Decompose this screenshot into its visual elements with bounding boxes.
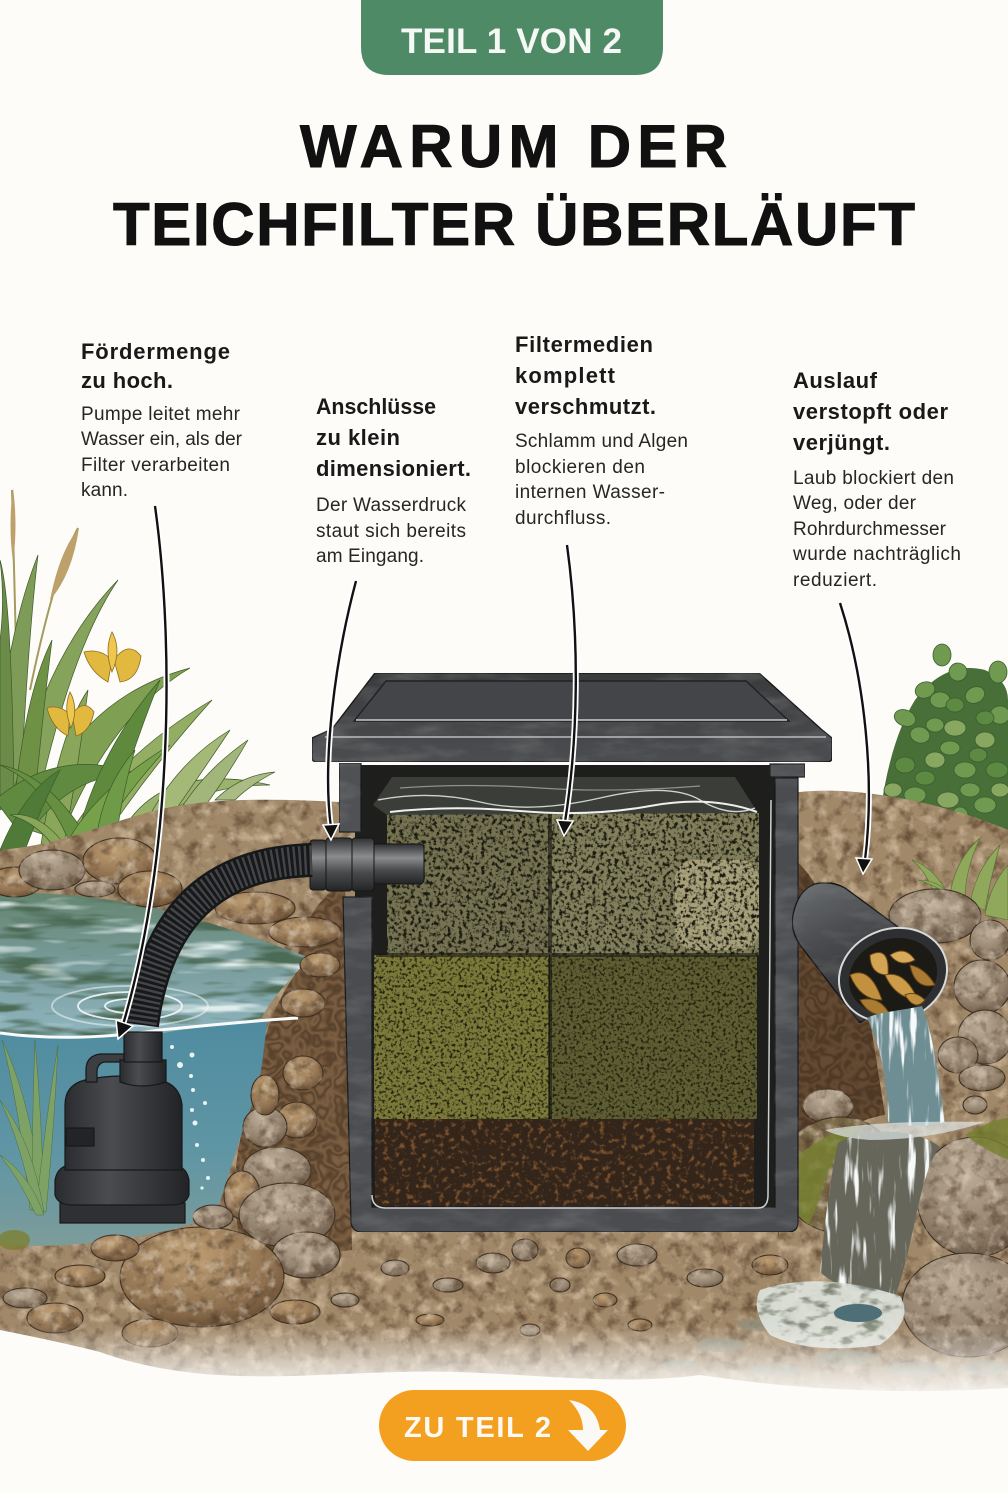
callout: connectors: dimensioniert. — [316, 456, 471, 481]
callout: pump flow: Pumpe leitet mehr — [81, 404, 241, 425]
filter sponge bottom left — [374, 955, 549, 1119]
pump base — [55, 1165, 189, 1205]
outlet pipe with leaves — [792, 883, 960, 1037]
title — [113, 113, 915, 258]
corrugated hose — [142, 860, 312, 1025]
callout: connectors: zu klein — [316, 425, 400, 450]
lower fall — [820, 1132, 940, 1294]
rocks and pebbles — [0, 838, 1008, 1357]
submersible pump — [55, 1032, 189, 1223]
callout: pump flow: Fördermenge — [81, 339, 230, 364]
tank body frame — [339, 763, 805, 1232]
icon: jammed leaves — [850, 951, 935, 1015]
ground bank — [0, 791, 1008, 1391]
icon: green bush — [880, 644, 1008, 835]
seam between sponges — [376, 813, 757, 1119]
pond surface — [0, 893, 310, 1038]
callout: connectors: am Eingang. — [316, 546, 424, 567]
callout: connectors: Der Wasserdruck — [316, 495, 466, 516]
pipe mouth rim — [826, 913, 960, 1037]
title: WARUM DER — [300, 113, 727, 180]
tank lid — [312, 673, 832, 762]
ground fade to page — [0, 1325, 1008, 1403]
foam line — [825, 1122, 985, 1140]
callout: outlet: verjüngt. — [793, 430, 890, 455]
small grass right — [912, 838, 1008, 920]
callout: connectors: staut sich bereits — [316, 521, 466, 542]
callout: filter media: verschmutzt. — [515, 394, 656, 419]
waterfall from outlet — [757, 1006, 985, 1348]
icon: cattail reeds — [10, 488, 79, 800]
icon: yellow iris flowers — [47, 632, 141, 736]
pump neck — [124, 1032, 162, 1062]
arrow: outlet callout to pipe — [840, 603, 872, 874]
tank interior — [355, 765, 780, 1215]
inlet pipe fitting — [310, 838, 424, 891]
callout: pump flow: zu hoch. — [81, 368, 173, 393]
filter sponge bottom right — [550, 955, 757, 1119]
arrow: pump callout to pump — [116, 506, 167, 1039]
tab: part label — [361, 0, 663, 75]
soil cross-section right of tank — [775, 860, 885, 1240]
upper stream — [867, 1006, 945, 1126]
overflowing filter tank — [310, 673, 832, 1232]
callout: connectors: Anschlüsse — [316, 394, 436, 419]
callout: outlet: Weg, oder der — [793, 493, 917, 514]
callout: filter media — [515, 332, 688, 529]
callout: pump flow: Wasser ein, als der — [81, 429, 243, 450]
tan soil surface — [0, 791, 1008, 1391]
callout: outlet — [792, 368, 961, 591]
underwater section — [0, 1020, 268, 1246]
callout: pump flow: Filter verarbeiten — [81, 455, 230, 476]
arrow: connector callout to fitting — [323, 581, 356, 840]
pump handle — [86, 1054, 124, 1082]
vent slots — [66, 1128, 94, 1146]
callout: outlet: Laub blockiert den — [793, 468, 954, 489]
ripples — [52, 986, 208, 1026]
callout: filter media: komplett — [515, 363, 616, 388]
soil cross-section left of tank — [235, 880, 352, 1262]
sludge layer — [375, 1119, 754, 1211]
callout: outlet: verstopft oder — [793, 399, 948, 424]
button: next part: ZU TEIL 2 — [404, 1412, 551, 1444]
moss on rocks — [0, 1118, 1008, 1250]
callout: pump flow — [81, 339, 243, 501]
illustration: pond and filter scene — [0, 488, 1008, 1403]
lighter patch on sponge — [675, 860, 759, 950]
callout: filter media: internen Wasser- — [515, 482, 665, 503]
filter sponge top left — [387, 813, 551, 955]
callout: filter media: durchfluss. — [515, 508, 611, 529]
callout: outlet: wurde nachträglich — [792, 544, 961, 565]
callout: outlet: reduziert. — [793, 570, 877, 591]
filter sponge top right — [551, 813, 759, 955]
icon: curved down arrow — [568, 1400, 608, 1451]
callout: filter media: Schlamm und Algen — [515, 431, 688, 452]
left pond plants — [0, 488, 275, 868]
callout: filter media: Filtermedien — [515, 332, 653, 357]
grass blades — [0, 555, 275, 868]
pale gravel wash — [662, 1319, 1008, 1378]
arrow: media callout to sponge — [557, 545, 576, 836]
pump feet — [60, 1203, 185, 1223]
underwater plant — [0, 1040, 58, 1215]
water surface inside tank — [373, 777, 758, 815]
right background plants — [880, 644, 1008, 835]
waterline — [0, 1018, 298, 1037]
tank highlights — [372, 800, 771, 1208]
bubbles — [170, 1045, 210, 1190]
pond — [0, 893, 310, 1246]
pipe body — [792, 883, 943, 1023]
button: next part — [379, 1390, 626, 1461]
callout: outlet: Auslauf — [793, 368, 878, 393]
callout: filter media: blockieren den — [515, 457, 645, 478]
pump body — [65, 1076, 182, 1170]
pump collar — [120, 1060, 166, 1086]
callout: connectors — [316, 394, 471, 567]
splash pool — [757, 1281, 904, 1348]
callout: pump flow: kann. — [81, 480, 128, 501]
dark pool stone — [834, 1304, 882, 1322]
title: TEICHFILTER ÜBERLÄUFT — [113, 191, 915, 258]
callout: outlet: Rohrdurchmesser — [793, 519, 947, 540]
tab: part label: TEIL 1 VON 2 — [401, 22, 622, 61]
